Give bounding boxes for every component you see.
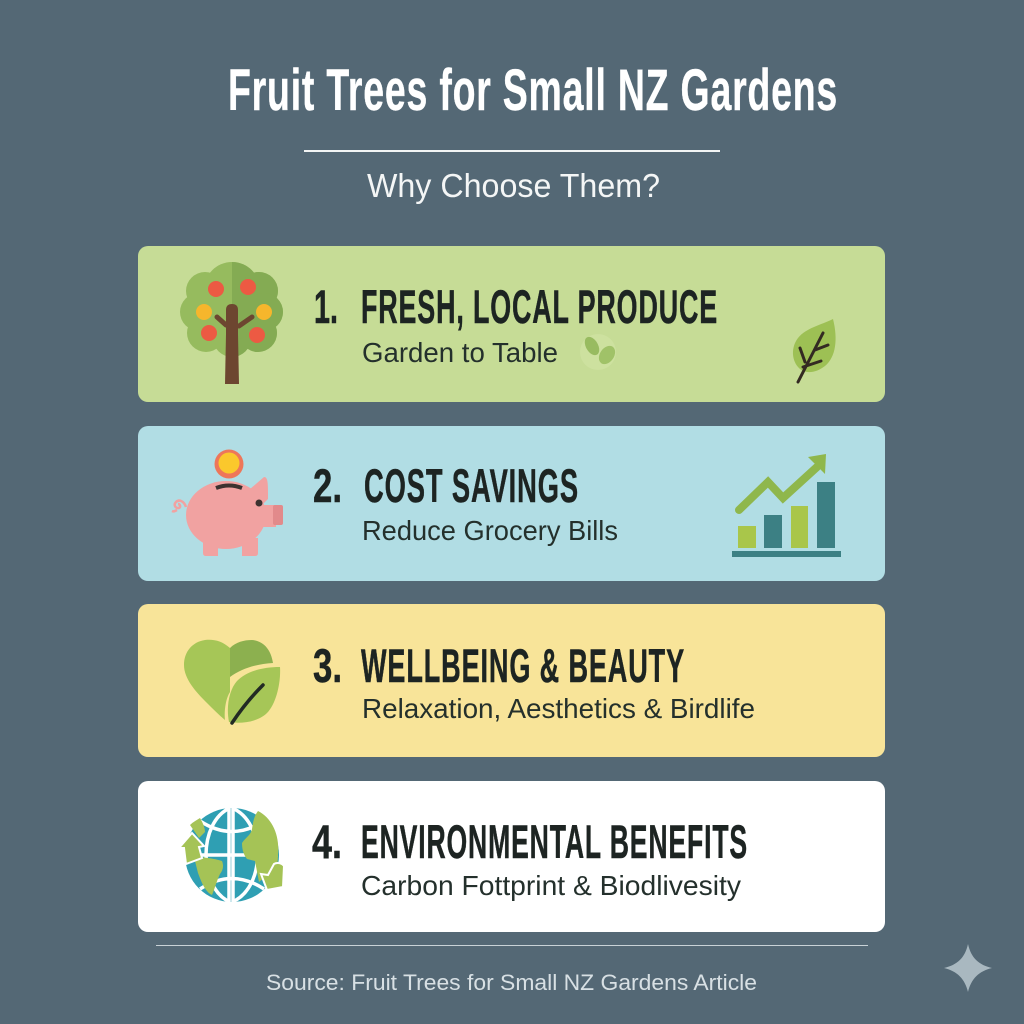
subheading: Relaxation, Aesthetics & Birdlife	[362, 693, 755, 724]
subheading: Reduce Grocery Bills	[362, 515, 618, 546]
icon: fruit tree	[180, 262, 283, 384]
panel: fresh local produce	[138, 246, 885, 402]
number 2: 2.	[313, 459, 342, 512]
icon: heart and leaf	[184, 640, 280, 723]
subheading: Garden to Table	[362, 337, 558, 368]
heading: FRESH, LOCAL PRODUCE	[361, 280, 718, 333]
subheading: Carbon Fottprint & Biodlivesity	[361, 870, 741, 901]
panel: wellbeing and beauty	[138, 604, 885, 757]
number 4: 4.	[312, 815, 342, 868]
heading: COST SAVINGS	[364, 459, 579, 512]
panel: cost savings	[138, 426, 885, 581]
icon: globe	[179, 808, 284, 902]
icon: sparkle	[944, 944, 992, 992]
icon: leaf	[793, 319, 836, 382]
number 3: 3.	[313, 639, 342, 692]
bar chart icon	[732, 454, 841, 557]
number 1: 1.	[314, 280, 338, 333]
source note: Source: Fruit Trees for Small NZ Gardens Article	[266, 970, 757, 995]
icon: piggy bank	[172, 450, 283, 556]
panel: environmental benefits	[138, 781, 885, 932]
icon: small sprout	[580, 334, 618, 370]
subtitle: Why Choose Them?	[367, 167, 660, 204]
heading: WELLBEING & BEAUTY	[361, 639, 685, 692]
